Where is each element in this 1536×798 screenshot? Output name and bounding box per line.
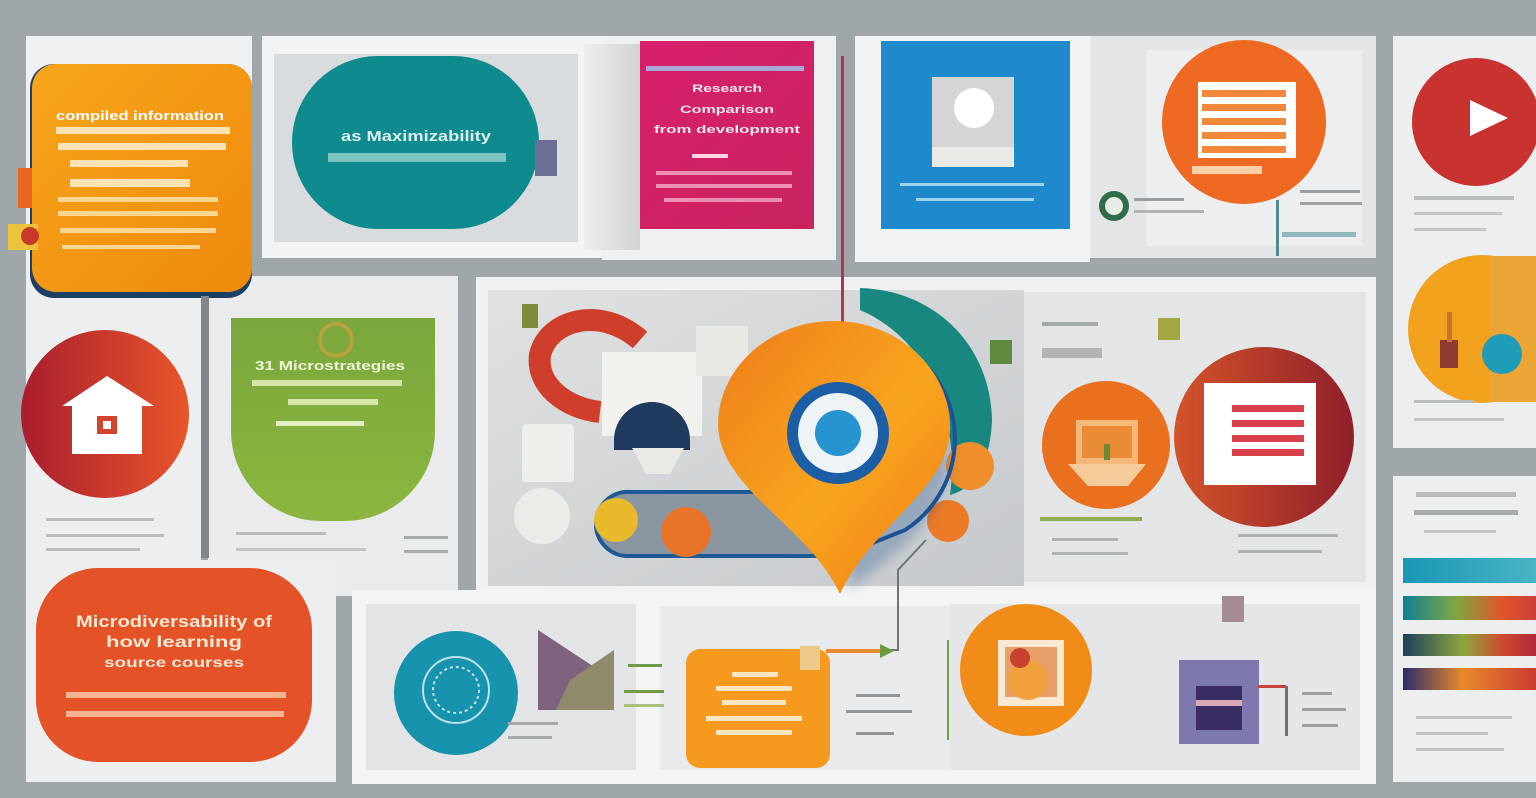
central illustration xyxy=(514,288,1012,650)
panel: pink card frame xyxy=(584,36,836,260)
caption: bottom right xyxy=(1302,692,1346,727)
green card: 31 Microstrategies xyxy=(255,358,405,373)
pink card: from development xyxy=(654,124,800,136)
panel: bottom strip xyxy=(352,590,1376,784)
vertical connector xyxy=(201,296,209,558)
orange ball xyxy=(661,507,711,557)
panel: top-right frame xyxy=(1090,36,1376,258)
icon: mountain photo xyxy=(538,630,614,710)
orange orbit dots xyxy=(946,442,994,490)
teal oval card xyxy=(292,56,557,229)
red-orange text card: source courses xyxy=(104,654,244,670)
navy shield xyxy=(614,402,690,450)
panel: blue card frame xyxy=(855,36,1090,262)
pink card: Research xyxy=(692,83,762,95)
small green icon xyxy=(522,304,538,328)
caption: central right bottom xyxy=(1040,517,1338,555)
icon: orange photo circle xyxy=(960,604,1092,736)
arrow: orange to green xyxy=(800,644,894,670)
caption: bottom teal xyxy=(508,722,558,739)
icon: teal badge xyxy=(394,631,518,755)
panel: teal oval frame xyxy=(262,36,602,258)
caption: left middle xyxy=(46,518,164,551)
white cup xyxy=(632,448,684,474)
caption: top-right xyxy=(1276,190,1362,256)
teal crescent xyxy=(860,288,992,495)
blue orbit xyxy=(830,345,955,560)
icon: red house circle xyxy=(21,330,189,498)
panel: far-right bottom xyxy=(1393,476,1536,782)
caption: green card xyxy=(236,532,448,553)
caption: bottom centre xyxy=(846,640,949,740)
red arc xyxy=(540,320,640,412)
panel: far-right top xyxy=(1393,36,1536,448)
pink card: Comparison xyxy=(680,104,774,116)
orange text card xyxy=(8,64,252,298)
red-orange text card xyxy=(36,568,312,762)
blue card xyxy=(881,41,1070,229)
orange card heading: compiled information xyxy=(56,108,224,123)
blue track xyxy=(596,492,830,556)
tile xyxy=(522,424,574,482)
icon: photo tile xyxy=(932,77,1014,167)
orange bottom card xyxy=(686,649,830,768)
paper tile xyxy=(696,326,748,376)
panel: central frame xyxy=(476,277,1376,597)
leader lines xyxy=(860,540,926,650)
caption: far right xyxy=(1414,196,1514,231)
caption: far right middle xyxy=(1414,400,1504,421)
connector line: pink to pin xyxy=(841,56,844,326)
hexagon tile xyxy=(514,488,570,544)
panel: left middle column xyxy=(26,276,201,576)
pin eye xyxy=(787,382,889,484)
green icon xyxy=(990,340,1012,364)
red-orange text card: Microdiversability of xyxy=(76,612,272,631)
icon: red play circle xyxy=(1412,58,1536,186)
document card xyxy=(602,352,702,436)
caption: central right top xyxy=(1042,318,1180,358)
icon: orange monitor circle xyxy=(1162,40,1326,204)
green card xyxy=(231,318,435,521)
small green icon and caption xyxy=(1099,191,1204,221)
red-orange text card: how learning xyxy=(106,634,242,651)
yellow ball xyxy=(594,498,638,542)
pink card xyxy=(640,41,814,229)
panel: green card background xyxy=(208,276,458,596)
panel: bottom-left xyxy=(26,560,336,782)
map pin xyxy=(718,321,950,594)
icon: orange monitor circle xyxy=(1042,381,1170,509)
icon: dark red document circle xyxy=(1174,347,1354,527)
panel: top-left column xyxy=(26,36,252,276)
small green markers xyxy=(624,664,664,707)
icon: orange circle with bottle xyxy=(1408,255,1536,403)
shadow xyxy=(830,350,950,590)
teal oval card: as Maximizability xyxy=(341,128,492,145)
icon: purple document tile xyxy=(1179,596,1288,744)
legend: colour bars xyxy=(1403,492,1536,751)
